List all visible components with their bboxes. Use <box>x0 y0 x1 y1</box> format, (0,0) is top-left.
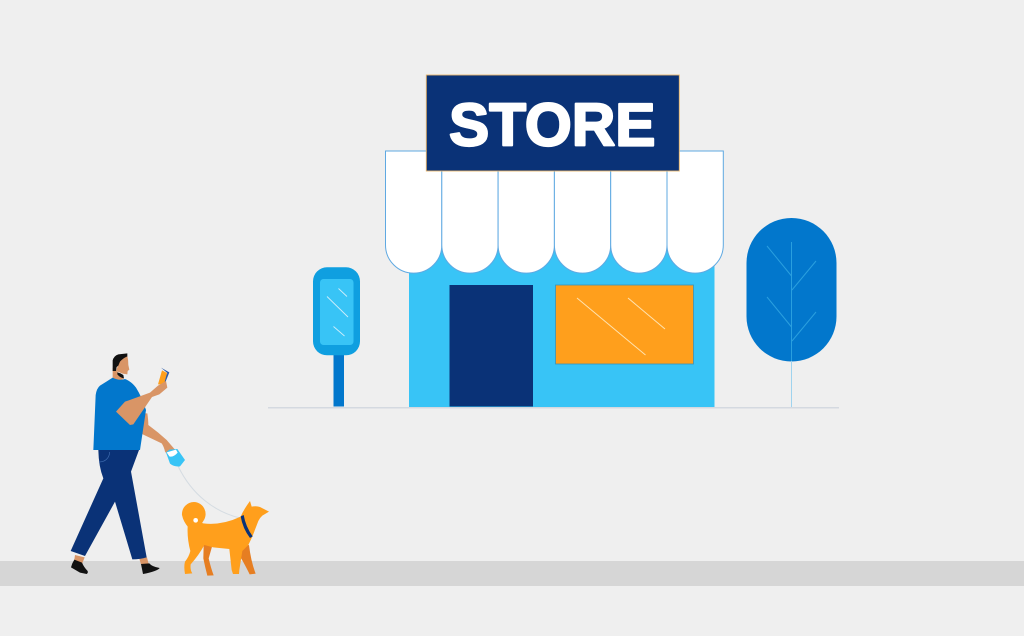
person legs <box>71 450 160 574</box>
shoes <box>71 560 160 574</box>
dog leash <box>178 466 240 518</box>
dog far legs <box>203 544 214 576</box>
kiosk sign <box>313 267 360 406</box>
store door <box>450 285 533 406</box>
trousers <box>71 450 147 559</box>
sidewalk strip <box>0 561 1024 586</box>
head <box>113 353 129 378</box>
tree <box>746 218 836 407</box>
t-shirt <box>93 378 146 450</box>
store building <box>409 250 714 407</box>
dog tail spot <box>193 518 198 523</box>
back arm <box>141 413 177 457</box>
neck <box>113 368 124 380</box>
dog tail <box>182 502 206 527</box>
leash handle <box>166 449 185 466</box>
dog <box>182 501 269 576</box>
store sign <box>426 75 679 171</box>
trouser pocket <box>99 452 110 462</box>
phone <box>158 368 169 384</box>
ankles <box>74 555 149 565</box>
ground line <box>268 407 839 408</box>
front arm and hand <box>116 381 167 425</box>
dog collar <box>241 515 253 538</box>
dog body <box>184 501 269 574</box>
sign text: STORE <box>449 92 656 158</box>
awning <box>386 151 723 273</box>
person upper body <box>93 353 185 466</box>
store window <box>556 285 694 364</box>
